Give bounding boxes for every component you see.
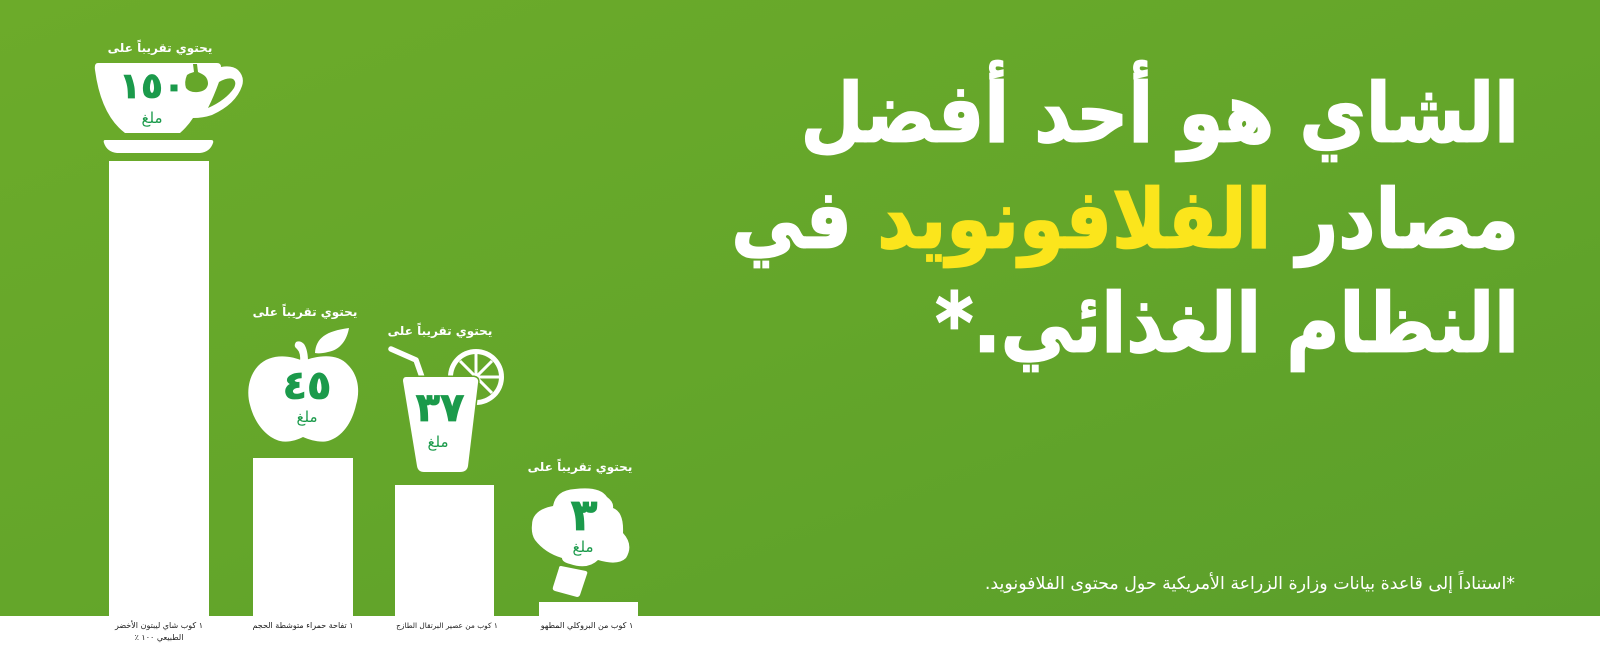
icon: juice glass with lemon	[391, 349, 504, 472]
caption: apple: ١ تفاحة حمراء متوشطة الحجم	[252, 621, 354, 630]
value: broccoli: ٣	[571, 490, 597, 541]
bar: orange juice	[395, 485, 494, 616]
title line 3: النظام الغذائي.*	[935, 277, 1519, 372]
footnote: *استناداً إلى قاعدة بيانات وزارة الزراعة الأمريكية حول محتوى الفلافونويد.	[985, 574, 1515, 594]
label: apple amount: يحتوي تقريباً على	[253, 305, 357, 319]
title	[731, 60, 1519, 372]
caption: broccoli: ١ كوب من البروكلي المطهو	[541, 621, 633, 630]
label: juice amount: يحتوي تقريباً على	[388, 324, 492, 338]
value: juice: ٣٧	[416, 385, 464, 431]
icon: tea cup	[95, 63, 243, 153]
icon: broccoli	[532, 488, 629, 597]
bar: broccoli	[539, 602, 638, 616]
title line 1: الشاي هو أحد أفضل	[801, 67, 1519, 162]
bar: green tea	[109, 161, 209, 616]
bar: apple	[253, 458, 353, 616]
icon: apple	[248, 328, 358, 442]
caption: juice: ١ كوب من عصير البرتقال الطازج	[396, 621, 498, 630]
caption: tea: ١ كوب شاي ليبتون الأخضر	[115, 621, 203, 630]
label: broccoli amount: يحتوي تقريباً على	[528, 460, 632, 474]
unit: juice: ملغ	[428, 433, 448, 451]
unit: tea: ملغ	[142, 109, 162, 127]
value: apple: ٤٥	[283, 363, 331, 409]
unit: apple: ملغ	[296, 408, 317, 426]
caption: tea: الطبيعي ١٠٠ ٪	[135, 633, 183, 642]
label: tea amount: يحتوي تقريباً على	[108, 41, 212, 55]
unit: broccoli: ملغ	[572, 538, 593, 556]
value: tea: ١٥٠	[119, 66, 185, 107]
caption: tea	[114, 620, 203, 642]
title line 2: مصادر الفلافونويد في	[731, 173, 1519, 268]
